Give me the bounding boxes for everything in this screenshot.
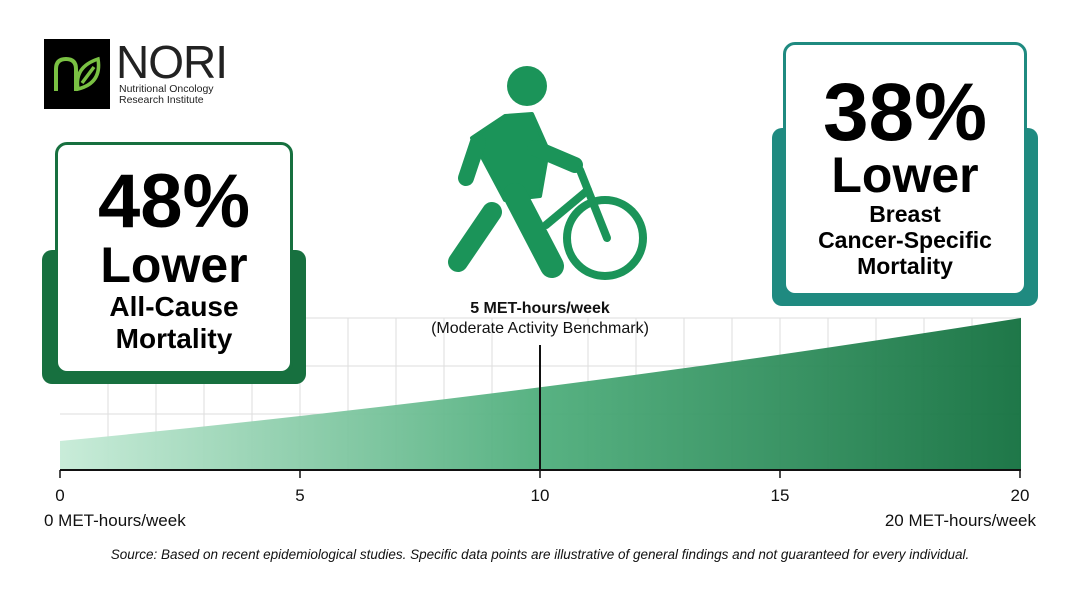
chart: 0 — [55, 486, 65, 505]
chart: 20 — [1011, 486, 1029, 505]
panel: 48%: Lower — [100, 237, 248, 293]
logo: Nutritional Oncology — [119, 83, 214, 95]
panel: 48%: 48% — [98, 159, 250, 244]
logo — [44, 36, 227, 109]
logo: Research Institute — [119, 94, 204, 106]
panel: 48%: All-Cause — [109, 291, 239, 322]
source note: Source: Based on recent epidemiological studies. Specific data points are illustrative of general findings and not guaranteed for every individual. — [111, 547, 969, 562]
icon: walking person with bicycle — [448, 66, 647, 280]
benchmark label: (Moderate Activity Benchmark) — [431, 320, 649, 337]
chart: 15 — [771, 486, 789, 505]
panel: 38%: 38% — [823, 67, 987, 158]
chart: 20 MET-hours/week — [885, 511, 1036, 530]
chart: 10 — [531, 486, 549, 505]
benchmark label: 5 MET-hours/week — [470, 300, 610, 317]
logo: NORI — [116, 36, 227, 88]
panel: 38%: Mortality — [857, 253, 953, 279]
chart: 5 — [295, 486, 305, 505]
panel: 38%: Lower — [831, 147, 979, 203]
benchmark label — [431, 300, 649, 337]
chart: 0 MET-hours/week — [44, 511, 186, 530]
panel: 38%: Cancer-Specific — [818, 227, 992, 253]
panel: 38% — [772, 42, 1038, 306]
panel: 48% — [42, 142, 306, 384]
panel: 48%: Mortality — [116, 323, 232, 354]
icon: leaf logo — [44, 39, 110, 109]
panel: 38%: Breast — [869, 201, 941, 227]
